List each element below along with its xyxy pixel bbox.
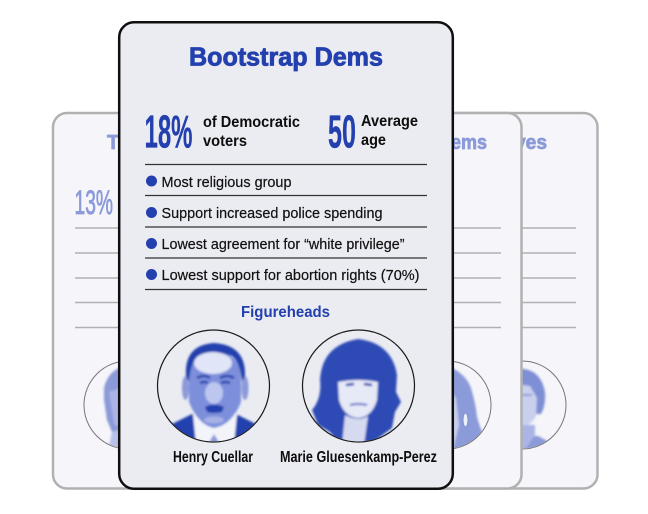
name: Henry Cuellar: Henry Cuellar: [173, 449, 253, 466]
portrait: back left: [84, 362, 118, 448]
stat: 50: 50: [328, 106, 356, 158]
heading: Figureheads: Figureheads: [241, 304, 330, 321]
heading fragment: back left: T: [107, 132, 119, 154]
title: Bootstrap Dems: [189, 42, 383, 72]
card: back right: [441, 112, 599, 490]
stat: 18%: 18%: [144, 106, 192, 158]
list item: white privilege: Lowest agreement for “white privilege”: [162, 236, 404, 253]
stat label: of Democratic voters: [203, 114, 300, 150]
portrait: back right: [522, 360, 566, 450]
list item: abortion rights: Lowest support for abortion rights (70%): [162, 267, 420, 284]
card: back middle: [441, 112, 523, 490]
divider lines: back right: [450, 228, 576, 328]
stat label: Average age: [361, 113, 418, 149]
portrait: back middle: [454, 361, 492, 449]
heading fragment: back right: ves: [515, 132, 547, 154]
portrait: Marie Gluesenkamp-Perez: [302, 330, 414, 445]
stat label: Average age: age: [361, 132, 386, 149]
card: Bootstrap Dems: [119, 22, 453, 489]
card: back left: [52, 112, 132, 490]
list item: Support increased police spending: Support increased police spending: [162, 205, 382, 222]
infographic: [52, 21, 599, 490]
divider lines: back left: [75, 228, 125, 328]
name: Marie Gluesenkamp-Perez: Marie Gluesenkamp-Perez: [280, 449, 437, 466]
portrait: Henry Cuellar: [158, 330, 270, 450]
divider lines: [145, 164, 427, 290]
heading fragment: back middle: ems: [451, 132, 487, 154]
divider lines: back middle: [440, 228, 501, 328]
stat label: Average age: Average: [361, 113, 418, 130]
list item: Most religious group: Most religious group: [162, 174, 292, 191]
stat label: of Democratic voters: of Democratic: [203, 114, 300, 131]
stat: 13%: 13%: [74, 184, 113, 222]
stat label: of Democratic voters: voters: [203, 133, 247, 150]
